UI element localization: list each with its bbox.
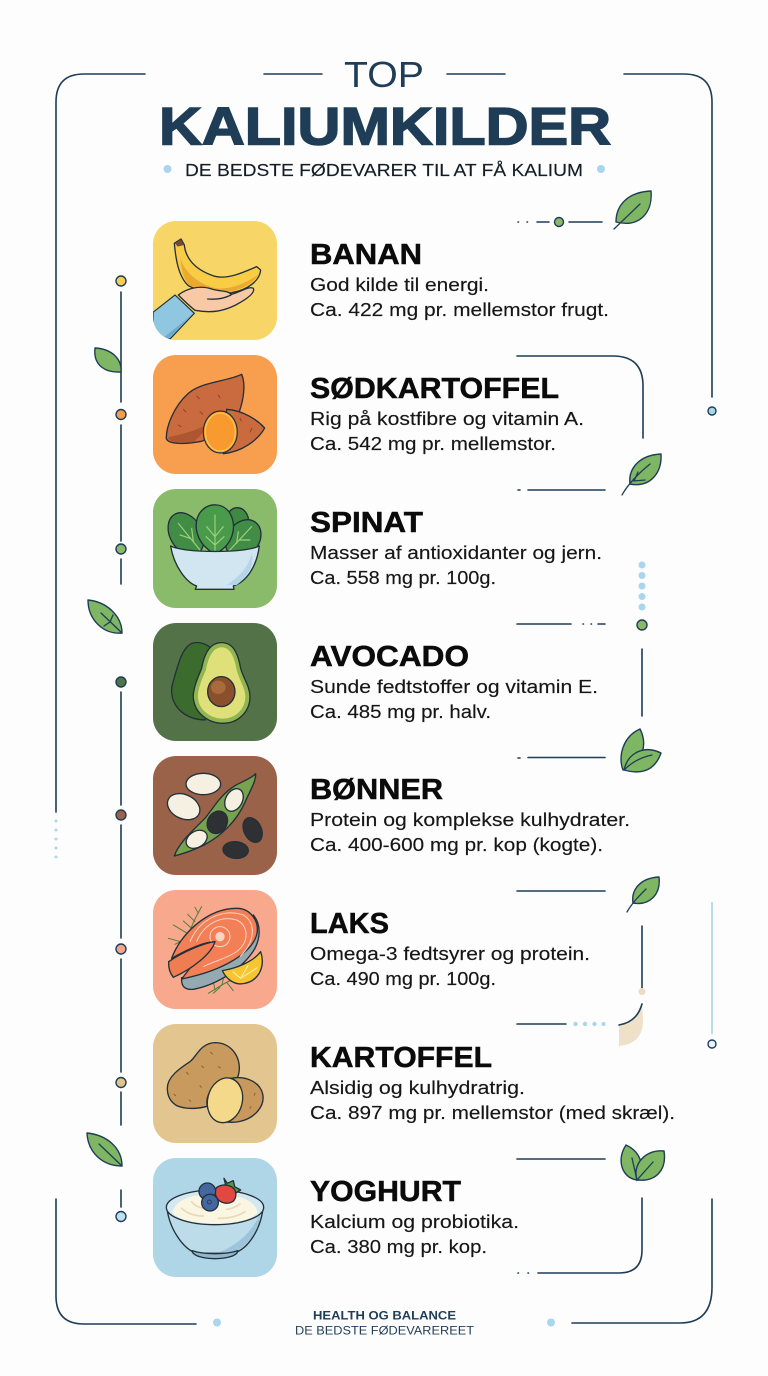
row: avocado xyxy=(153,623,598,741)
left timeline xyxy=(116,276,126,1222)
row: bønner xyxy=(153,756,630,875)
avocado text xyxy=(310,676,598,722)
laks text: Omega-3 fedtsyrer og protein. xyxy=(310,943,590,964)
yoghurt text: Ca. 380 mg pr. kop. xyxy=(310,1236,487,1257)
right decoration 5 xyxy=(517,1145,664,1273)
card icon: beans xyxy=(153,756,277,875)
card icon: spinach bowl xyxy=(153,489,277,608)
outer frame lines xyxy=(54,74,716,1326)
sødkartoffel text: Rig på kostfibre og vitamin A. xyxy=(310,408,584,429)
right decoration 2 xyxy=(517,356,661,495)
leaf left 3 xyxy=(87,1133,122,1166)
laks heading: LAKS xyxy=(310,908,389,940)
card icon: yoghurt bowl xyxy=(153,1158,277,1277)
card icon: potato xyxy=(153,1024,277,1143)
row: yoghurt xyxy=(153,1158,519,1277)
sødkartoffel heading: SØDKARTOFFEL xyxy=(310,373,559,405)
row: banan xyxy=(153,221,609,340)
row: kartoffel xyxy=(153,1024,675,1143)
footer: DE BEDSTE FØDEVAREREET xyxy=(295,1326,474,1338)
right decoration 4 xyxy=(517,877,659,1046)
banan text: Ca. 422 mg pr. mellemstor frugt. xyxy=(310,299,609,320)
footer xyxy=(295,1310,474,1338)
bønner text: Ca. 400-600 mg pr. kop (kogte). xyxy=(310,834,603,855)
card icon: salmon xyxy=(153,890,277,1009)
kartoffel text: Alsidig og kulhydratrig. xyxy=(310,1077,525,1098)
avocado heading: AVOCADO xyxy=(310,641,469,673)
bønner text: Protein og komplekse kulhydrater. xyxy=(310,809,630,830)
bønner heading: BØNNER xyxy=(310,774,443,806)
tan corner shape xyxy=(619,1004,643,1046)
spinat heading: SPINAT xyxy=(310,507,423,539)
right decoration 3 xyxy=(517,562,661,772)
leaf left 1 xyxy=(95,348,121,372)
spinat text xyxy=(310,542,602,588)
banan heading: BANAN xyxy=(310,239,422,271)
infographic canvas xyxy=(54,62,717,1335)
yoghurt heading: YOGHURT xyxy=(310,1176,461,1208)
row: laks xyxy=(153,890,590,1009)
spinat text: Ca. 558 mg pr. 100g. xyxy=(310,567,496,588)
footer: HEALTH OG BALANCE xyxy=(313,1310,456,1322)
yoghurt text xyxy=(310,1211,519,1257)
title: top: TOP xyxy=(344,54,424,95)
leaf right 2 xyxy=(622,454,661,495)
double leaf right xyxy=(621,729,661,772)
card icon: sweet potato xyxy=(153,355,277,474)
kartoffel text: Ca. 897 mg pr. mellemstor (med skræl). xyxy=(310,1102,675,1123)
leaf right top xyxy=(614,191,651,229)
banan text: God kilde til energi. xyxy=(310,274,489,295)
double leaf right 2 xyxy=(621,1145,664,1180)
sødkartoffel text xyxy=(310,408,584,454)
banan text xyxy=(310,274,609,320)
laks text: Ca. 490 mg pr. 100g. xyxy=(310,968,496,989)
card icon: avocado xyxy=(153,623,277,741)
row: spinat xyxy=(153,489,602,608)
avocado text: Ca. 485 mg pr. halv. xyxy=(310,701,491,722)
row: sødkartoffel xyxy=(153,355,584,474)
sødkartoffel text: Ca. 542 mg pr. mellemstor. xyxy=(310,433,556,454)
kartoffel heading: KARTOFFEL xyxy=(310,1042,492,1074)
card icon: banana xyxy=(153,221,277,340)
yoghurt text: Kalcium og probiotika. xyxy=(310,1211,519,1232)
subtitle: DE BEDSTE FØDEVARER TIL AT FÅ KALIUM xyxy=(185,160,583,180)
leaf right 4 xyxy=(627,877,659,912)
bønner text xyxy=(310,809,630,855)
kartoffel text xyxy=(310,1077,675,1123)
spinat text: Masser af antioxidanter og jern. xyxy=(310,542,602,563)
right decoration 1 xyxy=(518,191,651,229)
title: kaliumkilder: KALIUMKILDER xyxy=(159,98,611,156)
leaf left 2 xyxy=(88,600,122,633)
laks text xyxy=(310,943,590,989)
avocado text: Sunde fedtstoffer og vitamin E. xyxy=(310,676,598,697)
